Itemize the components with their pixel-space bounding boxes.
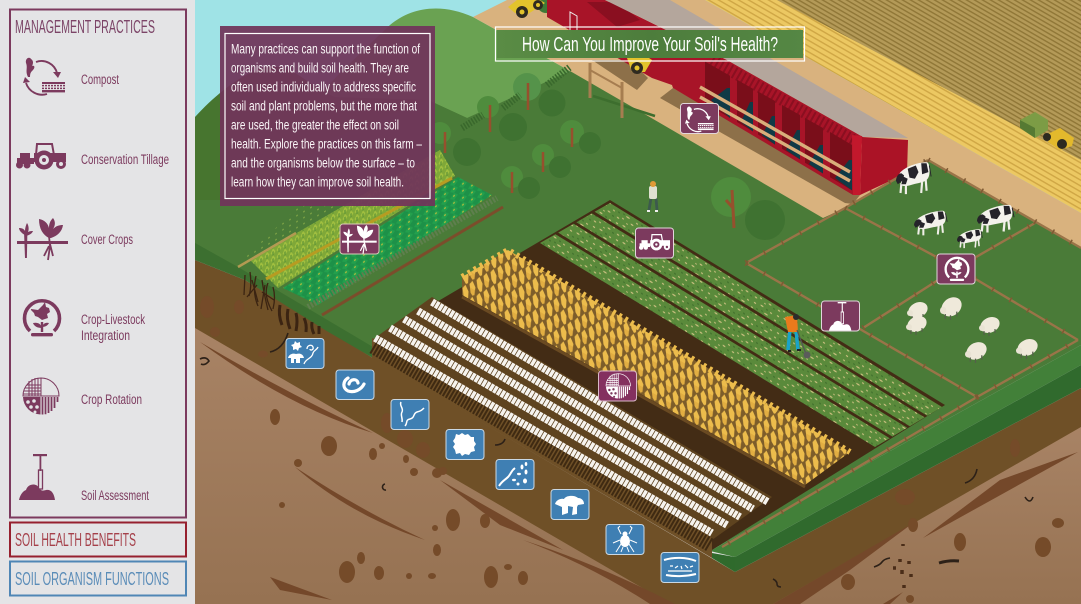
cover crop sparse seedlings [247, 206, 333, 257]
organism marker: mite [606, 524, 644, 554]
wooden frame [590, 63, 655, 118]
icon: compost [23, 58, 65, 95]
barn ground shadow by tractor [592, 60, 648, 90]
sheep [905, 294, 1040, 363]
heading: management practices: MANAGEMENT PRACTICES [15, 16, 155, 37]
marker: crop-livestock integration [937, 254, 975, 284]
label: crop rotation: Crop Rotation [81, 392, 142, 407]
label: soil assessment: Soil Assessment [81, 488, 149, 503]
old barn dark section [587, 2, 640, 27]
ground edge, front side [735, 365, 1081, 572]
panel: soil health benefits [10, 522, 186, 556]
hill: dark left [195, 66, 467, 260]
title: How Can You Improve Your Soil's Health? [522, 34, 778, 56]
crop: white rows [375, 302, 768, 533]
ground surface [195, 71, 1081, 551]
organism marker: protozoa spiral [336, 370, 374, 400]
icon: crop-livestock integration [24, 301, 60, 336]
panel text [231, 42, 422, 190]
organism marker: all organisms [286, 338, 324, 368]
label: cover crops: Cover Crops [81, 232, 133, 247]
icon: cover crops [17, 218, 68, 260]
tractor and trailer in field [1020, 112, 1074, 150]
icon: crop rotation [23, 378, 59, 414]
crop beds soil [372, 200, 945, 550]
pasture fences [722, 160, 1081, 547]
icon: soil assessment [19, 454, 55, 500]
trees [429, 73, 785, 240]
sidebar background [0, 0, 195, 604]
panel: soil health benefits: SOIL HEALTH BENEFITS [15, 530, 136, 550]
panel text: organisms and build soil health. They are [231, 60, 409, 76]
marker: compost [680, 104, 718, 134]
panel: soil organism functions: SOIL ORGANISM FUNCTIONS [15, 569, 169, 589]
crop: wheat [462, 250, 850, 487]
farmer with crossed arms [647, 181, 658, 211]
organism marker: worm and seeds [496, 460, 534, 490]
barn frieze [712, 60, 858, 143]
ground edge, corner [712, 553, 735, 572]
marker: conservation tillage [636, 228, 674, 258]
panel: soil organism functions [10, 562, 186, 596]
panel text: often used individually to address specific [231, 80, 416, 94]
marker: cover crops [340, 224, 379, 254]
panel text: soil and plant problems, but the more that [231, 98, 417, 114]
soil band below white crop rows [373, 347, 710, 545]
title [496, 27, 804, 61]
barn roof [605, 0, 908, 138]
farmer with shovel [785, 314, 810, 358]
barn ground shadow [660, 88, 860, 204]
subsoil, left [195, 328, 670, 604]
sky [195, 0, 1081, 300]
ground edge, front light strip [710, 345, 1081, 557]
crop roots [244, 272, 319, 334]
label: compost: Compost [81, 72, 119, 87]
barn corner post [852, 135, 862, 195]
panel text: learn how they can improve soil health. [231, 174, 404, 190]
tractor by barn [627, 58, 652, 74]
organism marker: fungi blob [446, 430, 484, 460]
crop: cover crops, bright green bed [283, 177, 503, 315]
barn rails [700, 87, 850, 181]
field edge strip, left [195, 243, 373, 358]
bed front soil face [372, 338, 712, 558]
marker: crop rotation [598, 371, 636, 401]
label: conservation tillage: Conservation Tillage [81, 152, 169, 167]
marker: soil assessment [822, 301, 860, 331]
tillage strips [540, 203, 942, 447]
icon: conservation tillage [16, 144, 66, 170]
organism marker: root and fungal strands [661, 552, 699, 582]
panel text: health. Explore the practices on this farm – [231, 136, 422, 152]
panel text: Many practices can support the function of [231, 42, 420, 56]
panel text: and the organisms below the surface – to [231, 156, 415, 170]
cows [896, 162, 1014, 248]
subsoil, right [773, 427, 1081, 604]
organism marker: mushrooms [551, 490, 589, 520]
label: crop-livestock integration: Integration [81, 328, 130, 343]
tractor near barn top [508, 0, 547, 18]
text panel [220, 26, 435, 206]
panel text: are used, the greater the effect on soil [231, 118, 399, 132]
hill: light green [324, 8, 570, 118]
hedgerow tufts [462, 67, 570, 128]
organism marker: nematodes [391, 400, 429, 430]
golden field [705, 0, 1081, 213]
topsoil [195, 260, 1081, 604]
road [473, 0, 1081, 248]
barn end wall [860, 137, 908, 195]
barn front wall [547, 0, 863, 195]
label: crop-livestock integration: Crop-Livestock [81, 312, 145, 327]
barn bays [705, 62, 852, 190]
soil stones [270, 409, 1064, 603]
panel: management practices [10, 10, 186, 518]
barn door outline [570, 12, 577, 30]
soil organisms, worms and seeds [200, 333, 1033, 588]
soil streaks [200, 342, 1078, 604]
white crop bed soil [372, 297, 772, 540]
crop: cover crops, chartreuse bed [238, 150, 455, 288]
